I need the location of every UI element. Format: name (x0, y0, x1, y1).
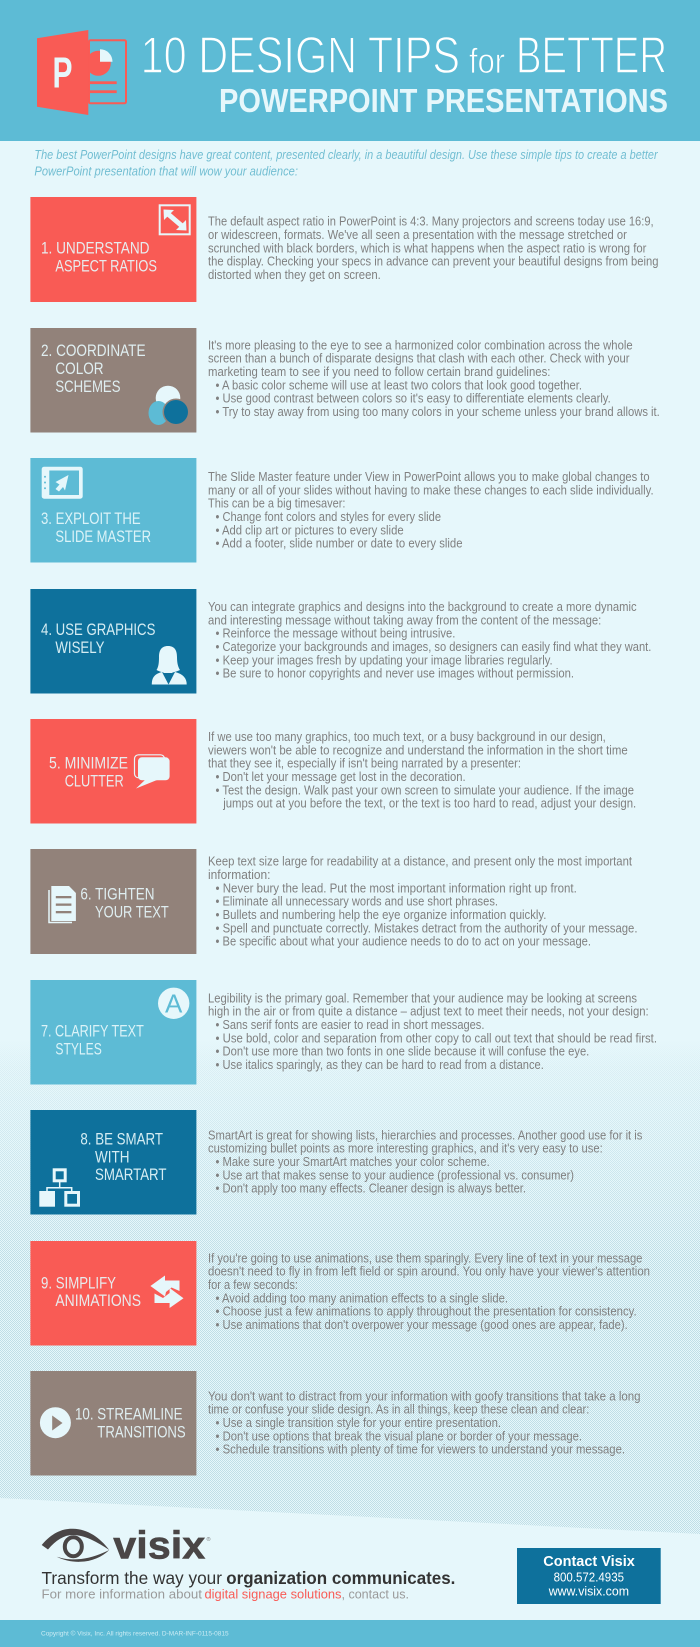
tip title: WISELY (55, 638, 104, 657)
tip text: If you're going to use animations, use them sparingly. Every line of text in your message (208, 1250, 642, 1265)
tip title: TRANSITIONS (97, 1422, 186, 1441)
icon: document (49, 886, 76, 922)
tip title: 2. COORDINATE (41, 341, 146, 360)
tip text: This can be a big timesaver: (208, 496, 346, 511)
tip title: 3. EXPLOIT THE (41, 509, 141, 528)
tip text: • Use italics sparingly, as they can be hard to read from a distance. (216, 1057, 544, 1072)
tip text: time or confuse your slide design. As in all things, keep these clean and clear: (208, 1402, 589, 1417)
tip text (208, 1388, 641, 1457)
tip text: customizing bullet points as more interesting graphics, and it's very easy to use: (208, 1141, 603, 1156)
tip text (208, 214, 658, 282)
tip text: • Don't let your message get lost in the decoration. (216, 769, 466, 784)
tip text: • Keep your images fresh by updating your image libraries regularly. (216, 652, 553, 667)
tip text: and interesting message without taking away from the content of the message: (208, 612, 601, 627)
tip text (208, 729, 636, 811)
tip text: marketing team to see if you need to follow certain brand guidelines: (208, 364, 550, 379)
tip title: STYLES (55, 1040, 102, 1059)
logo: Visix (42, 1524, 211, 1567)
tip title: ANIMATIONS (55, 1291, 141, 1310)
tip text: or widescreen, formats. We've all seen a presentation with the message stretched or (208, 227, 627, 242)
tip text: • Use a single transition style for your entire presentation. (216, 1415, 501, 1430)
tagline (42, 1568, 455, 1588)
tip text: The Slide Master feature under View in PowerPoint allows you to make global changes to (208, 469, 650, 484)
icon: swap arrows (150, 1276, 184, 1308)
contact prompt: For more information about (42, 1587, 202, 1602)
tip text: • Never bury the lead. Put the most important information right up front. (216, 880, 577, 895)
tip title (41, 620, 155, 657)
panel: tip 9 (30, 1241, 650, 1346)
intro text (34, 147, 658, 178)
tip text: • Change font colors and styles for every slide (216, 509, 441, 524)
title: for (469, 42, 505, 81)
tip text (208, 990, 657, 1072)
tip text (208, 599, 651, 681)
contact box: www.visix.com (548, 1584, 629, 1598)
tip text: • Add clip art or pictures to every slide (216, 522, 404, 537)
intro text: PowerPoint presentation that will wow your audience: (34, 164, 298, 178)
panel: tip 5 (30, 719, 636, 824)
tip text: It's more pleasing to the eye to see a harmonized color combination across the whole (208, 337, 633, 352)
tip title: SMARTART (95, 1165, 166, 1184)
icon: letter A (158, 988, 189, 1019)
icon: PowerPoint logo: P (52, 50, 72, 98)
panel: tip 8 (30, 1110, 642, 1214)
tip title: ASPECT RATIOS (55, 256, 157, 276)
icon: slide master (42, 467, 83, 499)
tip text: • Don't use options that break the visual plane or border of your message. (216, 1428, 582, 1443)
panel: tip 4 (30, 589, 651, 694)
tip title: 6. TIGHTEN (80, 884, 154, 903)
tip title: 5. MINIMIZE (49, 753, 128, 772)
tip text: • Don't use more than two fonts in one slide because it will confuse the eye. (216, 1044, 589, 1059)
tip text: • A basic color scheme will use at least two colors that look good together. (216, 377, 582, 392)
logo: Visix: visix (113, 1524, 206, 1567)
header banner (0, 0, 700, 141)
tip text: • Schedule transitions with plenty of time for viewers to understand your message. (216, 1442, 625, 1457)
tip text: doesn't need to fly in from left field or spin around. You only have your viewer's attention (208, 1264, 650, 1279)
tip title (41, 238, 157, 276)
tip title (41, 341, 146, 396)
tip text: • Test the design. Walk past your own screen to simulate your audience. If the image (216, 782, 634, 797)
tip text: that they see it, especially if isn't being narrated by a presenter: (208, 756, 521, 771)
panel: tip 10 (30, 1371, 641, 1476)
tip text: • Be specific about what your audience needs to do to act on your message. (216, 934, 591, 949)
footer bar: Copyright © Visix, Inc. All rights reserved. D-MAR-INF-0115-0815 (41, 1631, 229, 1638)
tip text: distorted when they get on screen. (208, 267, 381, 282)
tip text (208, 337, 660, 419)
icon: org chart (39, 1170, 78, 1207)
tip text: If we use too many graphics, too much text, or a busy background in our design, (208, 729, 606, 744)
contact prompt (42, 1587, 409, 1602)
tip title: COLOR (55, 359, 104, 378)
icon: play button (40, 1407, 71, 1438)
panel: tip 3 (30, 458, 654, 562)
tip title: 9. SIMPLIFY (41, 1273, 116, 1292)
panel: tip 6 (30, 849, 637, 954)
tip title: 1. UNDERSTAND (41, 238, 150, 258)
tip title: 8. BE SMART (80, 1129, 163, 1148)
tip text: • Reinforce the message without being intrusive. (216, 626, 455, 641)
panel: tip 7 (30, 980, 657, 1084)
tip title (49, 753, 128, 791)
icon: person (152, 646, 187, 684)
tip text (208, 1250, 650, 1332)
tip title: SLIDE MASTER (55, 527, 151, 546)
tip title (80, 1129, 166, 1184)
tip text (208, 854, 638, 949)
tip title: SCHEMES (55, 377, 120, 396)
tip text: • Choose just a few animations to apply throughout the presentation for consistency. (216, 1304, 637, 1319)
contact prompt: , contact us. (342, 1587, 409, 1602)
tagline: organization communicates. (226, 1568, 455, 1588)
icon: aspect ratio arrows (160, 205, 190, 234)
tip text: • Use good contrast between colors so it's easy to differentiate elements clearly. (216, 391, 611, 406)
tip text: high in the air or from quite a distance – adjust text to meet their needs, not your design: (208, 1004, 649, 1019)
tip title (41, 1273, 141, 1310)
panel: tip 2 (30, 328, 660, 432)
icon: letter A: A (165, 988, 183, 1018)
tip title: 7. CLARIFY TEXT (41, 1022, 144, 1041)
tip text: • Make sure your SmartArt matches your color scheme. (216, 1154, 490, 1169)
contact box: Contact Visix (543, 1554, 635, 1570)
tip text: screen than a bunch of disparate designs that clash with each other. Check with your (208, 351, 630, 366)
tip text: • Sans serif fonts are easier to read in short messages. (216, 1017, 484, 1032)
tip title: CLUTTER (65, 772, 124, 791)
contact box (517, 1548, 661, 1604)
tip title (75, 1404, 186, 1441)
title: 10 DESIGN TIPS (141, 27, 460, 85)
icon: PowerPoint logo (37, 30, 126, 115)
tip text: • Use animations that don't overpower your message (good ones are appear, fade). (216, 1317, 628, 1332)
tip text: Legibility is the primary goal. Remember that your audience may be looking at screens (208, 990, 637, 1005)
tip title: 10. STREAMLINE (75, 1404, 183, 1423)
tip text: many or all of your slides without having to make these changes to each slide individually. (208, 482, 654, 497)
icon: color circles (148, 386, 190, 426)
tip text: viewers won't be able to recognize and understand the information in the short time (208, 742, 628, 757)
tip text: • Eliminate all unnecessary words and use short phrases. (216, 894, 498, 909)
contact prompt: digital signage solutions (204, 1587, 342, 1602)
tip title: YOUR TEXT (95, 902, 169, 921)
tip text: Keep text size large for readability at a distance, and present only the most important (208, 854, 632, 869)
logo: Visix: ® (206, 1536, 211, 1543)
tip title (80, 884, 169, 921)
tip text: You can integrate graphics and designs into the background to create a more dynamic (208, 599, 637, 614)
tip title (41, 1022, 144, 1059)
icon: speech bubble (134, 755, 170, 788)
tip text: • Avoid adding too many animation effects to a single slide. (216, 1290, 508, 1305)
tip title (41, 509, 151, 546)
tip text: SmartArt is great for showing lists, hierarchies and processes. Another good use for it is (208, 1127, 642, 1142)
tip text: jumps out at you before the text, or the text is too hard to read, adjust your design. (222, 796, 636, 811)
tip text: • Spell and punctuate correctly. Mistakes detract from the authority of your message. (216, 920, 638, 935)
contact box: 800.572.4935 (554, 1571, 624, 1585)
tip text: for a few seconds: (208, 1277, 298, 1292)
tip text: • Be sure to honor copyrights and never use images without permission. (216, 666, 574, 681)
tip text: scrunched with black borders, which is what happens when the aspect ratio is wrong for (208, 240, 647, 255)
icon: eye (42, 1529, 109, 1562)
tip title: WITH (95, 1147, 130, 1166)
tip text (208, 469, 654, 551)
tip text (208, 1127, 642, 1196)
tip title: 4. USE GRAPHICS (41, 620, 155, 639)
tip text: information: (208, 867, 270, 882)
panel: tip 1 (30, 197, 658, 302)
tip text: • Add a footer, slide number or date to every slide (216, 536, 462, 551)
tagline: Transform the way your (42, 1568, 222, 1588)
tip text: • Don't apply too many effects. Cleaner design is always better. (216, 1181, 526, 1196)
title (141, 27, 668, 120)
tip text: • Use bold, color and separation from other copy to call out text that should be read first. (216, 1030, 657, 1045)
footer bar (0, 1620, 700, 1647)
tip text: • Bullets and numbering help the eye organize information quickly. (216, 907, 546, 922)
tip text: You don't want to distract from your information with goofy transitions that take a long (208, 1388, 641, 1403)
tip text: • Use art that makes sense to your audience (professional vs. consumer) (216, 1167, 574, 1182)
